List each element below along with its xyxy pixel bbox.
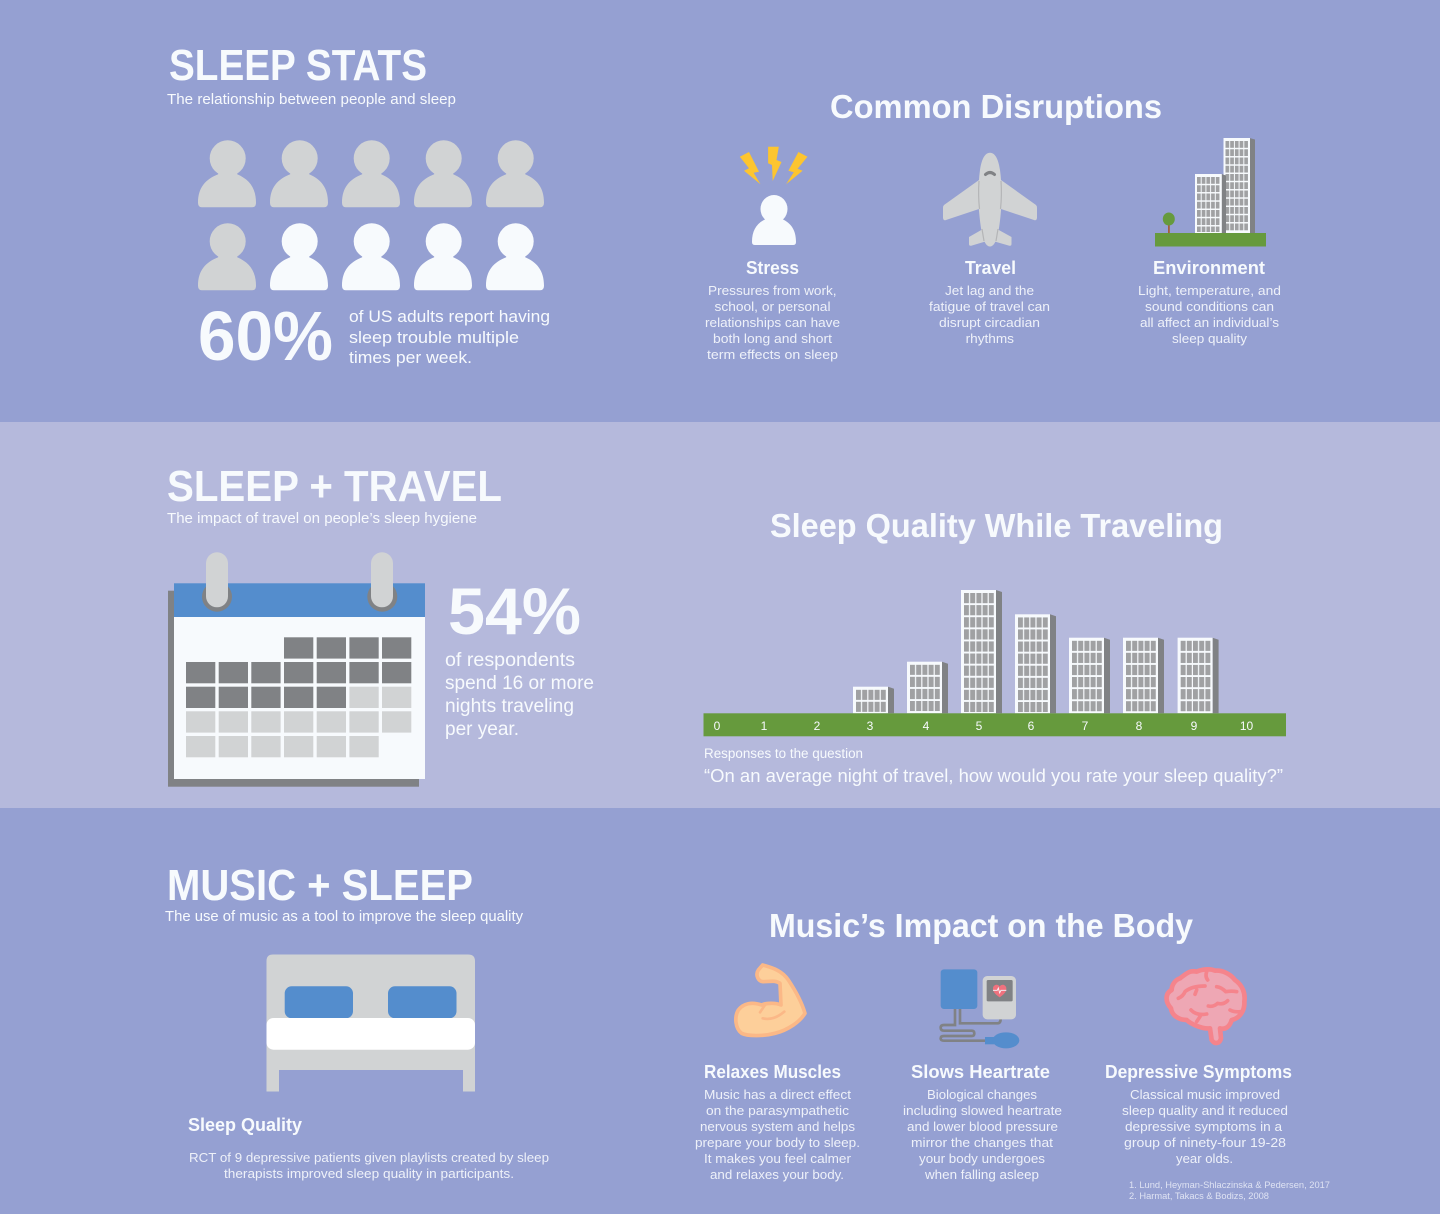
text block: slows heartrate description: Biological changes — [927, 1087, 1038, 1102]
text block: environment description: sleep quality — [1172, 331, 1248, 346]
footnotes: references: 2. Harmat, Takacs & Bodizs, 2008 — [1129, 1191, 1269, 1202]
text block: environment description: Light, temperature, and — [1138, 283, 1281, 298]
text block: relaxes muscles description: on the parasympathetic — [706, 1103, 850, 1118]
text block: stress description — [705, 283, 840, 362]
bar: rating 6 — [1015, 614, 1056, 713]
axis: green ground with ratings 0 to 10: 10 — [1240, 719, 1253, 733]
text block: slows heartrate description — [903, 1087, 1062, 1182]
text block: stress description: Pressures from work, — [708, 283, 837, 298]
bar: rating 9 — [1178, 638, 1219, 713]
bar: rating 8 — [1123, 638, 1164, 713]
icon: flexed arm — [736, 965, 805, 1036]
text block: sleep quality description: therapists improved sleep quality in participants. — [224, 1166, 514, 1181]
text block: environment description — [1138, 283, 1281, 346]
subtitle: music and sleep: The use of music as a tool to improve the sleep quality — [165, 909, 524, 925]
text block: slows heartrate description: including slowed heartrate — [903, 1103, 1062, 1118]
text block: relaxes muscles description: It makes you feel calmer — [704, 1151, 852, 1166]
text block: 60% description: of US adults report having — [349, 307, 550, 326]
text block: depressive symptoms description: Classical music improved — [1130, 1087, 1280, 1102]
text block: sleep quality description: RCT of 9 depressive patients given playlists created by sleep — [189, 1150, 549, 1165]
text block: travel description — [929, 283, 1050, 346]
panel: sleep stats background — [0, 0, 1440, 422]
caption: survey question: “On an average night of travel, how would you rate your sleep quality?” — [704, 766, 1283, 786]
text block: 54% description: spend 16 or more — [445, 673, 594, 694]
text block: relaxes muscles description: and relaxes your body. — [710, 1167, 844, 1182]
text block: stress description: school, or personal — [714, 299, 831, 314]
icon: brain — [1167, 969, 1245, 1043]
text block: relaxes muscles description — [695, 1087, 860, 1182]
text block: 60% description: sleep trouble multiple — [349, 328, 519, 347]
footnotes: references — [1129, 1180, 1330, 1202]
icon: city environment — [1155, 138, 1266, 246]
label: sleep quality: Sleep Quality — [188, 1115, 302, 1135]
big number: 60%: 60% — [198, 297, 333, 375]
axis: green ground with ratings 0 to 10: 3 — [867, 719, 874, 733]
bar: rating 3 — [853, 687, 894, 713]
text block: 54% description: per year. — [445, 719, 519, 740]
label: slows heartrate: Slows Heartrate — [911, 1062, 1050, 1082]
axis: green ground with ratings 0 to 10: 9 — [1191, 719, 1198, 733]
axis: green ground with ratings 0 to 10: 4 — [923, 719, 930, 733]
text block: slows heartrate description: your body undergoes — [919, 1151, 1046, 1166]
bar: rating 7 — [1069, 638, 1110, 713]
heading: music's impact on the body: Music’s Impact on the Body — [769, 907, 1194, 944]
axis: green ground with ratings 0 to 10: 1 — [761, 719, 768, 733]
label: environment: Environment — [1153, 258, 1265, 278]
pictogram: ten people, six grey and four white — [198, 140, 544, 290]
axis: green ground with ratings 0 to 10: 0 — [714, 719, 721, 733]
text block: depressive symptoms description: group of ninety-four 19-28 — [1124, 1135, 1286, 1150]
text block: depressive symptoms description: sleep quality and it reduced — [1122, 1103, 1288, 1118]
axis: green ground with ratings 0 to 10: 5 — [976, 719, 983, 733]
panel: sleep and travel background — [0, 422, 1440, 808]
text block: relaxes muscles description: Music has a direct effect — [704, 1087, 851, 1102]
axis: green ground with ratings 0 to 10: 7 — [1082, 719, 1089, 733]
bar: rating 4 — [907, 662, 948, 713]
title: music and sleep: MUSIC + SLEEP — [167, 861, 473, 910]
footnotes: references: 1. Lund, Heyman-Shlaczinska & Pedersen, 2017 — [1129, 1180, 1330, 1191]
text block: slows heartrate description: mirror the changes that — [911, 1135, 1053, 1150]
label: relaxes muscles: Relaxes Muscles — [704, 1062, 841, 1082]
icon: calendar with shaded days — [168, 552, 425, 787]
text block: 54% description — [445, 650, 594, 740]
label: depressive symptoms: Depressive Symptoms — [1105, 1062, 1292, 1082]
big number: 54%: 54% — [448, 574, 581, 648]
text block: slows heartrate description: and lower blood pressure — [907, 1119, 1058, 1134]
icon: blood pressure monitor — [941, 969, 1019, 1048]
label: travel: Travel — [965, 258, 1016, 278]
caption: survey question intro: Responses to the question — [704, 746, 863, 761]
subtitle: sleep stats: The relationship between people and sleep — [167, 92, 456, 108]
text block: depressive symptoms description: depressive symptoms in a — [1125, 1119, 1283, 1134]
text block: relaxes muscles description: nervous system and helps — [700, 1119, 856, 1134]
text block: depressive symptoms description — [1122, 1087, 1288, 1166]
chart: building bars of sleep quality ratings — [704, 590, 1286, 736]
subtitle: sleep and travel: The impact of travel on people’s sleep hygiene — [167, 511, 477, 527]
text block: travel description: disrupt circadian — [939, 315, 1040, 330]
icon: stress — [740, 147, 808, 245]
axis: green ground with ratings 0 to 10: 6 — [1028, 719, 1035, 733]
text block: 60% description: times per week. — [349, 348, 472, 367]
text block: travel description: Jet lag and the — [945, 283, 1034, 298]
text block: relaxes muscles description: prepare your body to sleep. — [695, 1135, 860, 1150]
text block: depressive symptoms description: year olds. — [1176, 1151, 1233, 1166]
title: sleep and travel: SLEEP + TRAVEL — [167, 462, 502, 511]
text block: 60% description — [349, 307, 550, 367]
text block: environment description: all affect an individual’s — [1140, 315, 1280, 330]
text block: stress description: term effects on sleep — [707, 347, 838, 362]
axis: green ground with ratings 0 to 10: 2 — [814, 719, 821, 733]
axis: green ground with ratings 0 to 10 — [704, 713, 1286, 736]
icon: bed — [266, 954, 475, 1092]
text block: travel description: fatigue of travel can — [929, 299, 1050, 314]
title: sleep stats: SLEEP STATS — [169, 41, 427, 90]
heading: sleep quality while traveling: Sleep Quality While Traveling — [770, 507, 1223, 544]
text block: 54% description: of respondents — [445, 650, 575, 671]
text block: slows heartrate description: when falling asleep — [924, 1167, 1039, 1182]
label: stress: Stress — [746, 258, 799, 278]
text block: stress description: both long and short — [713, 331, 832, 346]
icon: airplane — [943, 153, 1037, 246]
panel: music and sleep background — [0, 808, 1440, 1214]
text block: environment description: sound conditions can — [1145, 299, 1274, 314]
axis: green ground with ratings 0 to 10: 8 — [1136, 719, 1143, 733]
heading: common disruptions: Common Disruptions — [830, 88, 1162, 125]
bar: rating 5 — [961, 590, 1002, 713]
text block: 54% description: nights traveling — [445, 696, 574, 717]
text block: stress description: relationships can have — [705, 315, 840, 330]
text block: sleep quality description — [189, 1150, 549, 1181]
text block: travel description: rhythms — [966, 331, 1015, 346]
